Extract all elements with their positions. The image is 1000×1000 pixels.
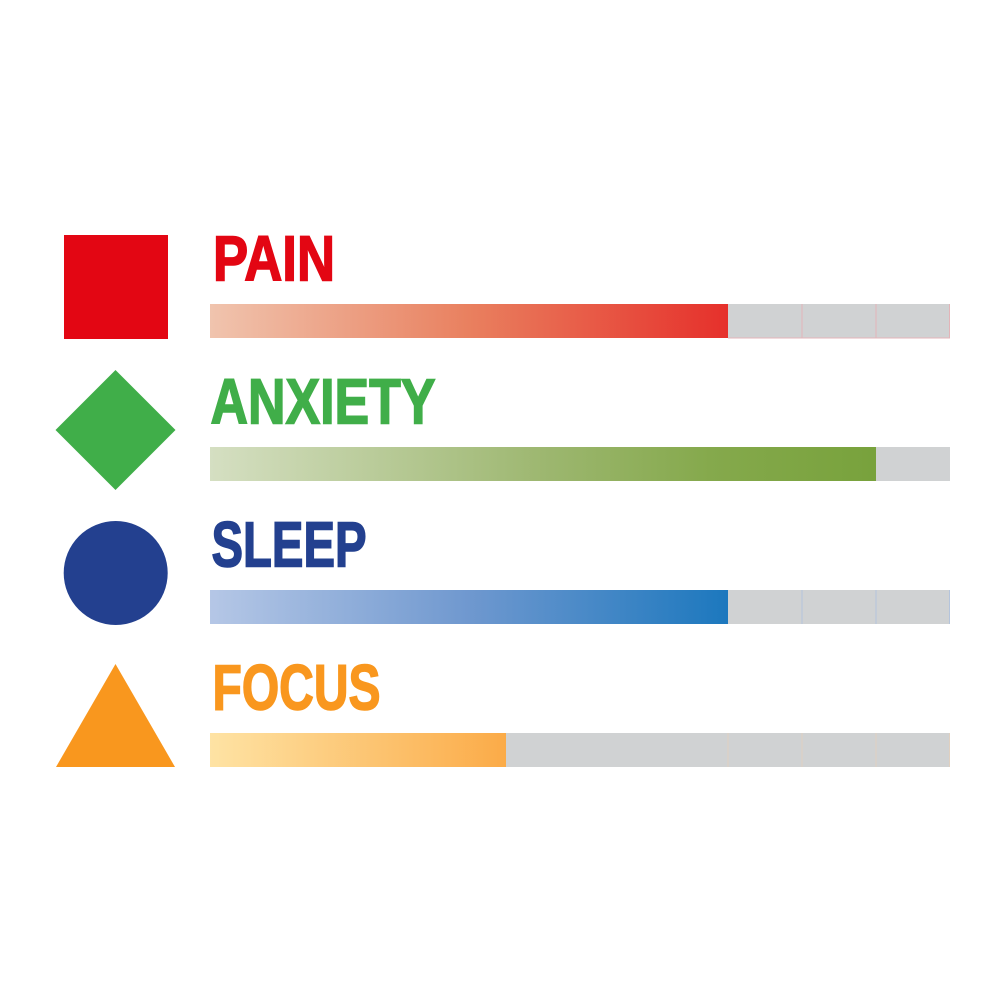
panel: pain row xyxy=(64,222,950,339)
bar: sleep level xyxy=(210,590,950,624)
icon: blue circle xyxy=(64,521,168,625)
icon: red square xyxy=(64,235,168,339)
heading: SLEEP: SLEEP xyxy=(212,508,366,580)
heading: ANXIETY: ANXIETY xyxy=(210,366,436,438)
bar: focus level xyxy=(210,733,950,767)
heading: PAIN: PAIN xyxy=(213,222,335,294)
icon: green diamond xyxy=(56,370,176,490)
panel: focus row xyxy=(56,652,950,767)
heading: FOCUS: FOCUS xyxy=(212,652,380,724)
bar: pain level xyxy=(210,304,950,338)
bar: anxiety level xyxy=(210,447,950,481)
panel: sleep row xyxy=(64,508,950,625)
panel: anxiety row xyxy=(56,366,950,490)
icon: orange triangle xyxy=(56,664,175,767)
